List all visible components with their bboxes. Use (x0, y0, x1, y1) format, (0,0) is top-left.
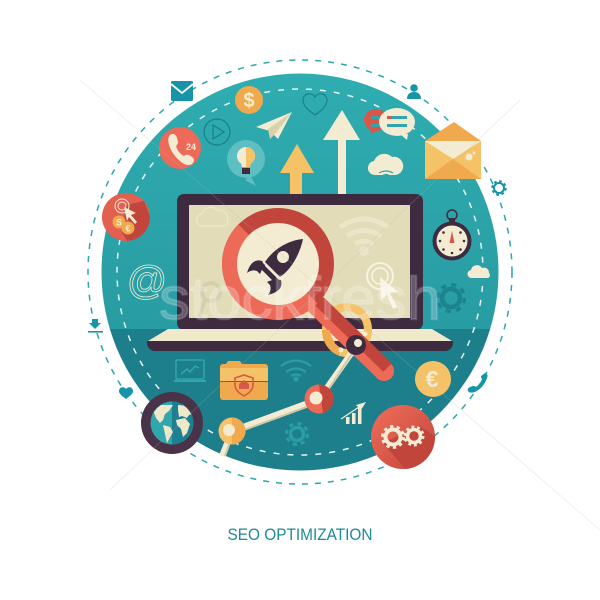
icon: gears badge (371, 405, 435, 469)
laptop screen (189, 205, 410, 318)
icon: gear right (492, 182, 506, 194)
icon: rocket (247, 239, 303, 295)
icon: open envelope (425, 122, 481, 179)
icon: phone right (468, 373, 488, 393)
inner dashed orbit (117, 89, 483, 455)
icon: at sign: @ (127, 259, 167, 303)
magnifying glass (222, 208, 388, 371)
chart node orange (218, 418, 246, 444)
icon: heart outline (303, 94, 327, 115)
icon: monitor chart (174, 360, 206, 381)
icon: play button (204, 119, 230, 145)
laptop lid (177, 194, 423, 330)
icon: 24 hour phone (159, 127, 201, 169)
icon: envelope top left (171, 81, 193, 101)
watermark lines (80, 80, 600, 530)
icon: wifi cloud (368, 154, 403, 176)
outer dashed orbit (88, 60, 512, 484)
icon: euro coin: € (426, 366, 439, 392)
infographic canvas (80, 59, 600, 540)
chain ring front and node (326, 330, 368, 355)
magnifier ring (222, 208, 334, 320)
laptop (147, 194, 453, 351)
icon: growth chart (341, 402, 366, 424)
icon: folder with shield (220, 361, 268, 400)
icon: paper plane (256, 112, 292, 139)
screen icon: cloud (196, 207, 228, 226)
main teal circle (100, 72, 500, 472)
icon: stopwatch (432, 210, 472, 260)
icon: euro coin (415, 361, 451, 397)
icon: dollar coin (235, 86, 263, 114)
laptop keyboard base (148, 329, 452, 341)
icon: small cloud right (467, 265, 490, 278)
screen icon: wifi (340, 219, 388, 254)
icon: dollar coin: $ (243, 90, 255, 112)
icon: light bulb bubble (227, 140, 265, 186)
screen icon: click cursor (367, 263, 398, 309)
chart line (222, 345, 357, 456)
arrow: large cream up (323, 110, 360, 194)
icon: globe (141, 392, 203, 454)
chart node red (304, 384, 334, 414)
icon: 24 hour phone: 24 (186, 142, 196, 152)
icon: gear on screen edge (438, 284, 464, 312)
screen icon: ghost magnifier (199, 283, 220, 317)
icon: chat bubbles (364, 108, 415, 140)
chain ring orange (326, 307, 368, 353)
icon: target with coins: S (116, 218, 122, 228)
watermark text: stockfresh (159, 265, 441, 332)
icon: download (88, 319, 103, 333)
icon: target with coins: € (125, 224, 131, 234)
icon: gear lower (286, 424, 308, 444)
icon: heart solid (119, 387, 133, 399)
laptop lower edge (147, 341, 453, 351)
title: SEO OPTIMIZATION (228, 525, 372, 544)
icon: person (407, 84, 421, 99)
icon: wifi lower (281, 360, 311, 380)
magnifier handle (316, 305, 384, 371)
magnifier lens (237, 223, 319, 305)
arrow: small orange up (280, 144, 314, 194)
icon: target with coins (102, 193, 150, 241)
